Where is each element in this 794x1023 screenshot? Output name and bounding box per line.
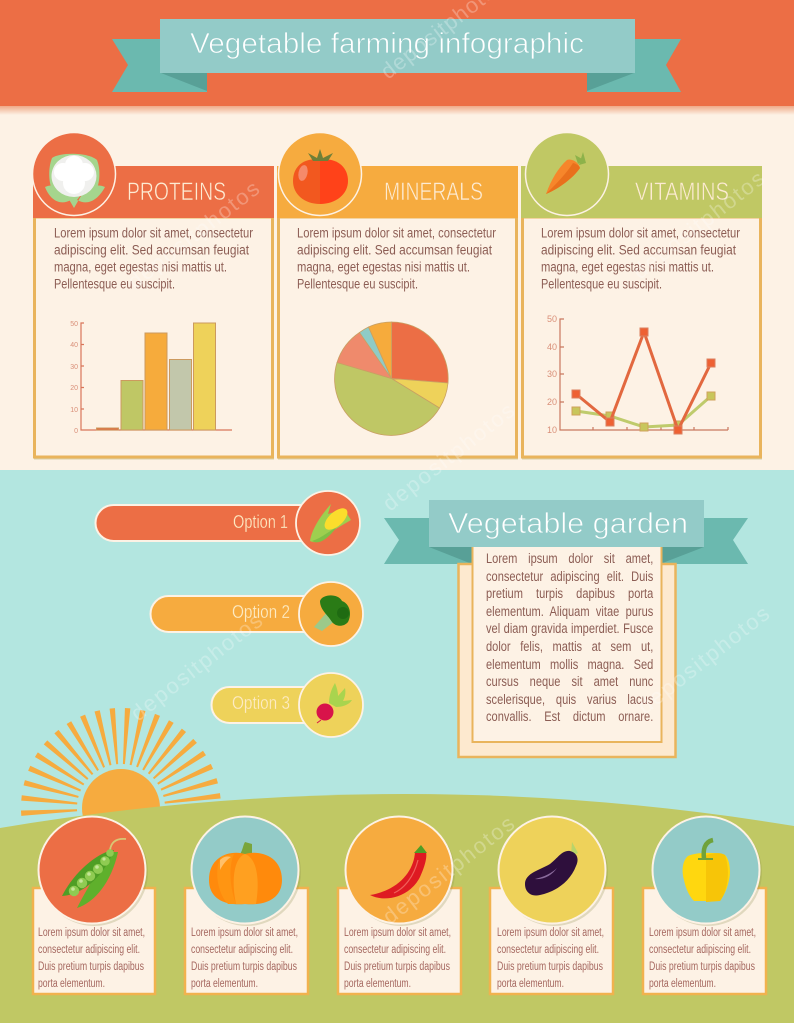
text block: porta elementum. bbox=[497, 978, 564, 990]
text block: consectetur adipiscing elit. bbox=[344, 944, 446, 956]
green hill bbox=[0, 794, 794, 1023]
text block bbox=[344, 927, 451, 990]
text block: Lorem ipsum dolor sit amet, bbox=[486, 551, 653, 566]
text block: adipiscing elit. Sed accumsan feugiat bbox=[54, 242, 249, 258]
watermarks: depositphotos bbox=[126, 608, 267, 726]
text block: convallis. Est dictum ornare. bbox=[486, 709, 653, 724]
option 2 bbox=[150, 582, 363, 646]
card: pepper bbox=[643, 816, 766, 994]
card: pea bbox=[33, 816, 155, 994]
heading: VITAMINS bbox=[635, 178, 729, 206]
icon: pea pod bbox=[62, 839, 126, 908]
text block: Lorem ipsum dolor sit amet, bbox=[649, 927, 756, 939]
text block: Duis pretium turpis dapibus bbox=[497, 961, 603, 973]
text block: Lorem ipsum dolor sit amet, bbox=[497, 927, 604, 939]
text block: Pellentesque eu suscipit. bbox=[541, 276, 662, 292]
line chart: 50 bbox=[547, 314, 557, 324]
text block: consectetur adipiscing elit. Duis bbox=[486, 569, 653, 584]
text block bbox=[191, 927, 298, 990]
icon: chili bbox=[370, 845, 427, 898]
icon: carrot bbox=[526, 132, 608, 216]
title: Vegetable farming infographic bbox=[190, 28, 584, 60]
option 2: Option 2 bbox=[232, 602, 290, 622]
icon: yellow pepper bbox=[683, 840, 730, 902]
option 3 bbox=[212, 673, 363, 737]
card: chili bbox=[338, 816, 461, 994]
text block: pretium turpis dapibus porta bbox=[486, 586, 653, 601]
line chart: 40 bbox=[547, 342, 557, 352]
text block: Lorem ipsum dolor sit amet, bbox=[344, 927, 451, 939]
text block bbox=[541, 226, 740, 292]
icon: tomato bbox=[278, 132, 362, 216]
watermarks: depositphotos bbox=[378, 398, 519, 516]
text block: porta elementum. bbox=[38, 978, 105, 990]
text block: porta elementum. bbox=[344, 978, 411, 990]
text block: Pellentesque eu suscipit. bbox=[54, 276, 175, 292]
bar chart: 10 bbox=[70, 407, 78, 414]
heading: PROTEINS bbox=[127, 178, 226, 206]
bar chart: 20 bbox=[70, 385, 78, 392]
pie chart bbox=[335, 322, 448, 435]
text block bbox=[38, 927, 145, 990]
icon: broccoli bbox=[299, 582, 363, 646]
text block: Duis pretium turpis dapibus bbox=[191, 961, 297, 973]
text block: Lorem ipsum dolor sit amet, consectetur bbox=[541, 226, 740, 240]
text block bbox=[497, 927, 604, 990]
watermarks: depositphotos bbox=[633, 601, 774, 719]
text block: Duis pretium turpis dapibus bbox=[649, 961, 755, 973]
icon: pumpkin bbox=[209, 842, 282, 904]
watermarks bbox=[123, 0, 774, 929]
panel: minerals bbox=[277, 132, 518, 460]
icon: radish bbox=[299, 673, 363, 737]
text block: adipiscing elit. Sed accumsan feugiat bbox=[541, 242, 736, 258]
text block: scelerisque, quis varius lacus bbox=[486, 692, 653, 707]
card: eggplant bbox=[490, 816, 613, 994]
bar chart: 0 bbox=[74, 428, 78, 435]
watermarks: depositphotos bbox=[378, 811, 519, 929]
bar chart bbox=[70, 321, 232, 435]
text block: dolor felis, mattis at sem ut, bbox=[486, 639, 653, 654]
text block: Pellentesque eu suscipit. bbox=[297, 276, 418, 292]
bar chart: 50 bbox=[70, 321, 78, 328]
bar chart: 40 bbox=[70, 342, 78, 349]
text block bbox=[486, 550, 698, 735]
text block: cursus neque sit amet nunc bbox=[486, 674, 653, 689]
line chart: 30 bbox=[547, 369, 557, 379]
text block bbox=[54, 226, 253, 292]
text block: consectetur adipiscing elit. bbox=[38, 944, 140, 956]
text block: adipiscing elit. Sed accumsan feugiat bbox=[297, 242, 492, 258]
option 1 bbox=[96, 491, 360, 555]
header band bbox=[0, 0, 794, 115]
heading: MINERALS bbox=[384, 178, 483, 206]
watermarks: depositphotos bbox=[123, 176, 264, 294]
text block: magna, eget egestas nisi mattis ut. bbox=[297, 260, 470, 274]
icon: eggplant bbox=[525, 842, 578, 896]
sun bbox=[21, 708, 221, 847]
text block: consectetur adipiscing elit. bbox=[649, 944, 751, 956]
panel: proteins bbox=[32, 132, 274, 460]
text block: magna, eget egestas nisi mattis ut. bbox=[54, 260, 227, 274]
panel: vegetable garden bbox=[384, 500, 748, 757]
text block: consectetur adipiscing elit. bbox=[191, 944, 293, 956]
bar chart: 30 bbox=[70, 364, 78, 371]
line chart: 10 bbox=[547, 425, 557, 435]
title ribbon bbox=[112, 19, 681, 92]
text block: Lorem ipsum dolor sit amet, consectetur bbox=[54, 226, 253, 240]
text block: Duis pretium turpis dapibus bbox=[344, 961, 450, 973]
text block: porta elementum. bbox=[191, 978, 258, 990]
text block: consectetur adipiscing elit. bbox=[497, 944, 599, 956]
text block: porta elementum. bbox=[649, 978, 716, 990]
text block: Duis pretium turpis dapibus bbox=[38, 961, 144, 973]
text block: vel diam gravida imperdiet. Fusce bbox=[486, 621, 653, 636]
icon: corn bbox=[296, 491, 360, 555]
line chart bbox=[547, 314, 728, 435]
option 1: Option 1 bbox=[233, 512, 288, 532]
text block bbox=[297, 226, 496, 292]
text block: elementum mollis magna. Sed bbox=[486, 657, 653, 672]
text block: Lorem ipsum dolor sit amet, bbox=[191, 927, 298, 939]
panel: vitamins bbox=[521, 132, 762, 460]
text block bbox=[649, 927, 756, 990]
card: pumpkin bbox=[185, 816, 308, 994]
icon: cauliflower bbox=[32, 132, 116, 216]
text block: magna, eget egestas nisi mattis ut. bbox=[541, 260, 714, 274]
text block: Lorem ipsum dolor sit amet, bbox=[38, 927, 145, 939]
option 3: Option 3 bbox=[232, 693, 290, 713]
text block: elementum. Aliquam vitae purus bbox=[486, 604, 653, 619]
watermarks: depositphotos bbox=[628, 166, 769, 284]
heading: Vegetable garden bbox=[448, 508, 688, 540]
line chart: 20 bbox=[547, 397, 557, 407]
text block: Lorem ipsum dolor sit amet, consectetur bbox=[297, 226, 496, 240]
